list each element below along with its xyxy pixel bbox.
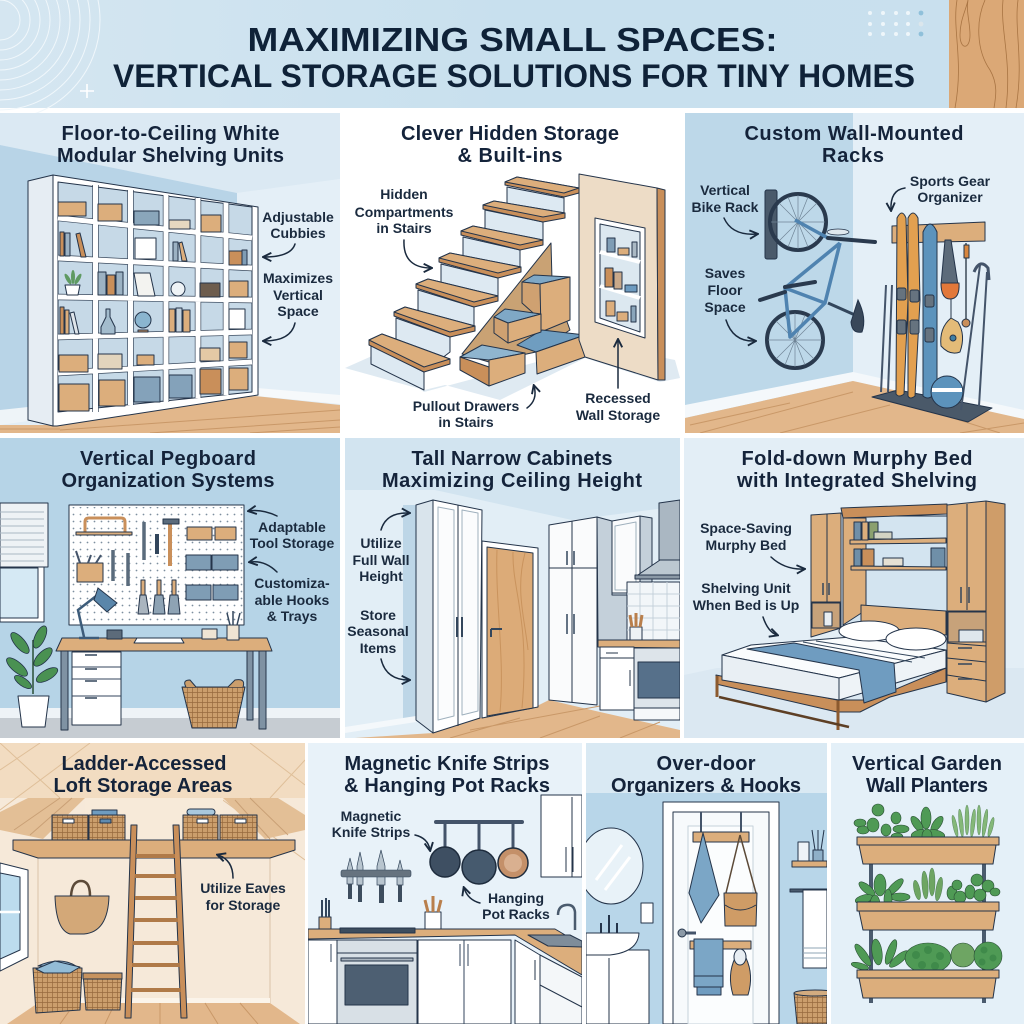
label: utilize full wall height: Full Wall	[352, 552, 410, 568]
label: adjustable cubbies	[262, 209, 334, 257]
floor	[7, 1003, 300, 1024]
hanging racket	[965, 243, 967, 325]
window	[0, 863, 28, 971]
heading: with Integrated Shelving	[736, 470, 977, 492]
wooden door	[482, 541, 538, 718]
label: shelving unit when bed is up: When Bed is Up	[693, 597, 799, 613]
heading	[54, 753, 232, 797]
murphy bed unit	[811, 501, 1005, 702]
recessed wall	[579, 174, 665, 380]
window	[0, 503, 48, 622]
label: sports gear organizer	[891, 173, 991, 210]
label: store seasonal items: Items	[360, 640, 396, 656]
label: space-saving murphy bed: Space-Saving	[700, 520, 792, 536]
label: saves floor space: Floor	[708, 282, 743, 298]
label: pullout drawers: in Stairs	[438, 414, 494, 430]
hanging bag	[55, 881, 109, 934]
upper cabinet	[541, 795, 582, 877]
decorative concentric rings	[0, 0, 100, 120]
panel: custom wall racks	[685, 113, 1024, 433]
label: store seasonal items: Store	[360, 607, 396, 623]
pegboard	[69, 505, 244, 625]
label: shelving unit when bed is up	[693, 580, 799, 635]
label: customizable hooks and trays	[250, 562, 330, 624]
tall cabinet	[416, 500, 482, 733]
skis and snowboard	[896, 213, 937, 398]
hanging net bag	[941, 240, 959, 299]
label: utilize eaves: Utilize Eaves	[200, 880, 286, 896]
staircase	[369, 177, 582, 390]
hanging shield	[941, 299, 963, 353]
panel: magnetic knife strips and pot racks	[308, 743, 582, 1024]
over-door hook rail	[693, 812, 749, 842]
label: pullout drawers	[413, 386, 535, 430]
desk lamp	[78, 588, 117, 638]
faucet	[558, 905, 575, 930]
knife strip	[341, 850, 411, 903]
label: vertical bike rack: Bike Rack	[692, 199, 759, 215]
floor	[685, 381, 1024, 433]
middle planter	[854, 868, 1000, 930]
floor	[0, 396, 340, 433]
ski poles	[881, 265, 987, 410]
heading	[382, 448, 642, 492]
label: store seasonal items: Seasonal	[347, 623, 409, 639]
label: maximizes vertical space: Maximizes	[263, 270, 333, 286]
heading: Custom Wall-Mounted	[744, 123, 964, 145]
heading: Organization Systems	[62, 470, 274, 492]
heading	[344, 753, 550, 797]
label: magnetic knife strips: Magnetic	[341, 808, 402, 824]
label: vertical bike rack	[692, 182, 759, 234]
title: MAXIMIZING SMALL SPACES:	[248, 21, 778, 58]
stair treads	[369, 177, 579, 372]
helmet	[931, 376, 963, 408]
heading	[736, 448, 977, 492]
heading: Clever Hidden Storage	[401, 123, 619, 145]
heading: Modular Shelving Units	[57, 145, 284, 167]
label: utilize full wall height: Utilize	[360, 535, 402, 551]
shelving unit	[28, 175, 258, 426]
floor shadow	[345, 345, 680, 400]
title: VERTICAL STORAGE SOLUTIONS FOR TINY HOMES	[113, 58, 915, 94]
potted plant	[4, 624, 60, 727]
label: hidden compartments: Compartments	[355, 204, 454, 220]
loft shelf with baskets	[13, 809, 295, 858]
panel: murphy bed	[684, 438, 1024, 738]
pullout drawers	[460, 275, 585, 386]
heading: Organizers & Hooks	[611, 775, 801, 797]
label: hidden compartments: Hidden	[380, 186, 428, 202]
label: space-saving murphy bed: Murphy Bed	[706, 537, 786, 553]
top planter	[854, 804, 999, 864]
label: vertical bike rack: Vertical	[700, 182, 750, 198]
small plant	[64, 270, 82, 284]
desk	[56, 611, 272, 730]
bed	[716, 621, 946, 730]
label: adaptable tool storage: Tool Storage	[250, 535, 334, 551]
label: utilize eaves: for Storage	[206, 897, 281, 913]
heading: Tall Narrow Cabinets	[412, 448, 612, 470]
heading: Wall Planters	[866, 775, 988, 797]
label: customizable hooks and trays: able Hooks	[255, 592, 330, 608]
label: sports gear organizer: Organizer	[917, 189, 983, 205]
heading: Loft Storage Areas	[54, 775, 232, 797]
bicycle frame	[785, 220, 840, 337]
label: recessed wall storage: Recessed	[585, 390, 651, 406]
panel: loft storage	[0, 743, 305, 1024]
towel bar	[790, 889, 827, 968]
label: pullout drawers: Pullout Drawers	[413, 398, 519, 414]
wicker basket	[794, 990, 836, 1024]
heading: Vertical Pegboard	[80, 448, 256, 470]
hanging towel	[689, 833, 719, 923]
panel: over-door organizers	[579, 743, 836, 1024]
label: adaptable tool storage: Adaptable	[258, 519, 326, 535]
label: recessed wall storage: Wall Storage	[576, 407, 660, 423]
heading: Floor-to-Ceiling White	[62, 123, 280, 145]
floor baskets	[33, 961, 122, 1013]
heading: Over-door	[656, 753, 756, 775]
woven basket	[182, 680, 245, 728]
panel: vertical garden	[831, 743, 1024, 1024]
stored boxes	[58, 202, 248, 411]
heading: & Built-ins	[458, 145, 562, 167]
heading	[852, 753, 1002, 797]
label: adjustable cubbies: Cubbies	[270, 225, 326, 241]
heading: Maximizing Ceiling Height	[382, 470, 642, 492]
panel: floor-to-ceiling shelving	[0, 113, 340, 433]
heading: Racks	[822, 145, 884, 167]
panel: clever hidden storage	[345, 123, 680, 430]
label: utilize eaves	[200, 855, 286, 913]
heading: Ladder-Accessed	[62, 753, 226, 775]
heading	[62, 448, 274, 492]
label: space-saving murphy bed	[700, 520, 804, 569]
plus sparkle	[80, 84, 94, 98]
label: recessed wall storage	[576, 340, 660, 423]
heading	[57, 123, 284, 167]
utensil crock	[319, 896, 441, 930]
kitchen counter and cabinets	[308, 928, 582, 1024]
bike rack and bicycle	[760, 190, 875, 368]
heading	[745, 125, 962, 162]
title	[113, 21, 915, 94]
label: utilize full wall height	[352, 513, 410, 584]
wheels	[767, 194, 826, 368]
kitchen units	[549, 500, 680, 720]
label: maximizes vertical space: Vertical	[273, 287, 323, 303]
label: hanging pot racks: Hanging	[488, 890, 544, 906]
panel: pegboard	[0, 438, 340, 738]
label: store seasonal items	[347, 607, 409, 680]
label: customizable hooks and trays: & Trays	[267, 608, 318, 624]
wall switch	[641, 903, 653, 923]
sports gear organizer	[872, 213, 992, 422]
label: hanging pot racks	[464, 888, 550, 922]
right shelf	[792, 830, 827, 867]
round mirror	[579, 828, 643, 904]
pot rack	[430, 820, 528, 884]
label: magnetic knife strips: Knife Strips	[332, 824, 410, 840]
heading	[611, 753, 801, 797]
label: maximizes vertical space: Space	[277, 303, 319, 319]
label: saves floor space	[704, 265, 755, 341]
label: customizable hooks and trays: Customiza-	[254, 575, 330, 591]
label: adjustable cubbies: Adjustable	[262, 209, 334, 225]
dot grid	[868, 11, 923, 36]
heading: & Hanging Pot Racks	[344, 775, 550, 797]
ladder	[125, 825, 187, 1018]
hanging bag	[724, 835, 757, 926]
sink vanity	[586, 915, 649, 1024]
label: sports gear organizer: Sports Gear	[910, 173, 991, 189]
label: utilize full wall height: Height	[359, 568, 403, 584]
heading: Vertical Garden	[852, 753, 1002, 775]
label: shelving unit when bed is up: Shelving Unit	[701, 580, 791, 596]
bottom planter	[851, 938, 1002, 998]
label: magnetic knife strips	[332, 808, 430, 850]
heading: Fold-down Murphy Bed	[742, 448, 972, 470]
heading: Magnetic Knife Strips	[344, 753, 550, 775]
label: hanging pot racks: Pot Racks	[482, 906, 550, 922]
lower rail with towel and pouch	[690, 939, 751, 995]
label: hidden compartments: in Stairs	[376, 220, 432, 236]
header banner	[0, 0, 1024, 120]
label: adaptable tool storage	[249, 511, 334, 551]
door	[663, 802, 779, 1024]
wood corner	[949, 0, 1024, 108]
label: hidden compartments	[355, 186, 454, 268]
floor	[355, 700, 680, 738]
heading	[401, 123, 619, 167]
planter frame	[871, 860, 984, 1003]
label: saves floor space: Space	[704, 299, 746, 315]
label: saves floor space: Saves	[705, 265, 745, 281]
label: maximizes vertical space	[263, 270, 333, 341]
stair cutout	[462, 243, 570, 362]
panel: tall narrow cabinets	[345, 438, 680, 738]
